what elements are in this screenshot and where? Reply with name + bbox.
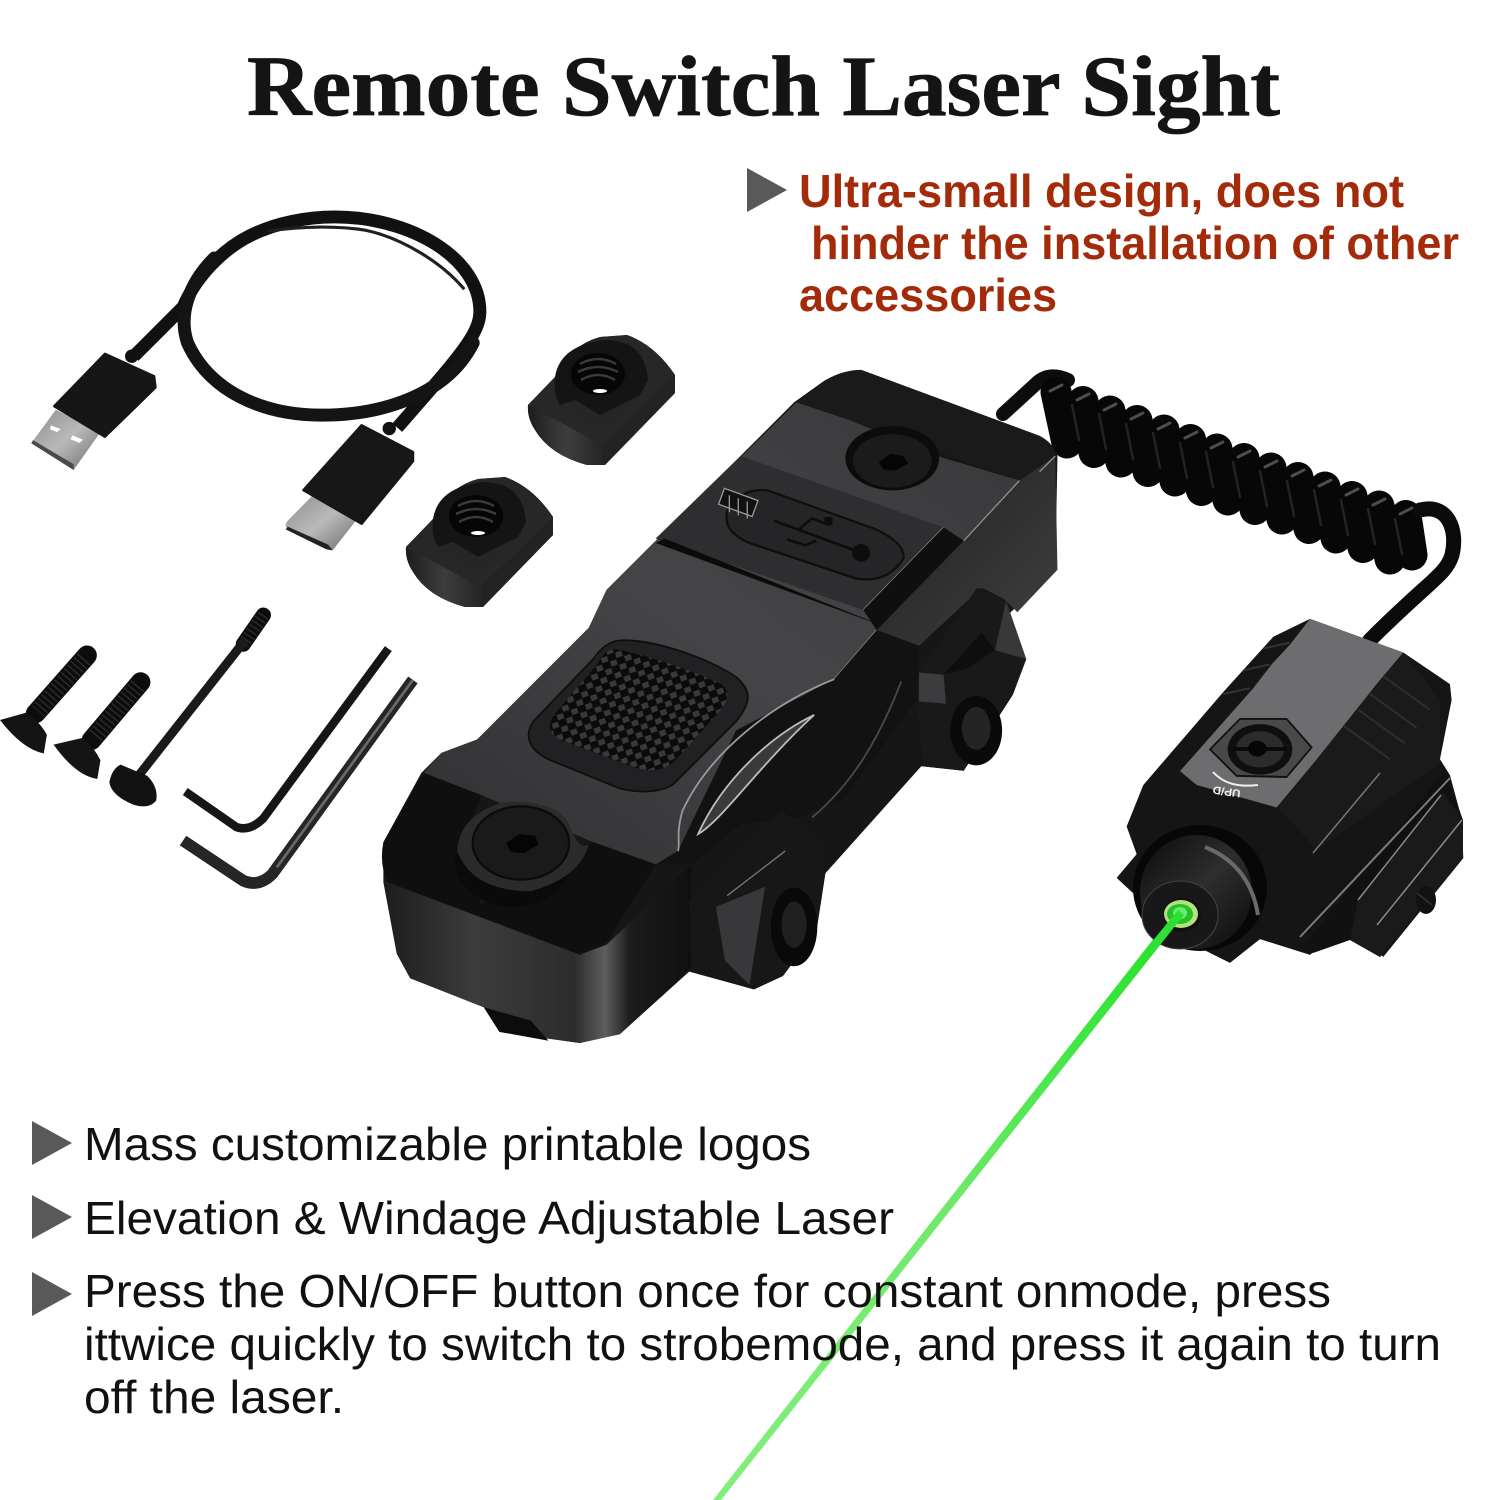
bottom mounting foot bbox=[484, 1007, 549, 1041]
feature: adjustable laser: Elevation & Windage Adjustable Laser bbox=[84, 1192, 894, 1244]
feature: button operation: off the laser. bbox=[84, 1371, 344, 1423]
body silhouette bbox=[383, 370, 1057, 1043]
groove bbox=[656, 539, 877, 623]
side notch bbox=[863, 527, 964, 630]
edge highlights bbox=[834, 456, 1055, 679]
callout: ultra-small design: Ultra-small design, does not bbox=[799, 165, 1404, 217]
feature: button operation: Press the ON/OFF button once for constant onmode, press bbox=[84, 1265, 1331, 1317]
front side face bbox=[383, 864, 691, 1043]
T-nut mount 1 bbox=[528, 335, 675, 465]
laser sight module bbox=[1117, 619, 1463, 963]
lens housing bbox=[1133, 825, 1267, 951]
switch recess bbox=[529, 640, 748, 791]
UP/D marking: UP/D bbox=[1212, 783, 1241, 799]
coiled cable bbox=[1003, 376, 1454, 640]
callout: ultra-small design bbox=[747, 165, 1459, 321]
feature list bbox=[32, 1118, 1441, 1423]
callout: ultra-small design: accessories bbox=[799, 269, 1057, 321]
USB cover band bbox=[656, 456, 944, 610]
callout: ultra-small design: hinder the installation of other bbox=[811, 217, 1459, 269]
grey top face bbox=[424, 402, 1020, 864]
hex keys bbox=[183, 649, 413, 883]
knurled pressure button bbox=[550, 649, 727, 770]
curved clamp cut-out bbox=[656, 630, 919, 864]
UP/D marking bbox=[1212, 772, 1258, 799]
green laser beam bbox=[713, 909, 1184, 1500]
top dark band bbox=[794, 370, 1055, 481]
mounting screws bbox=[0, 615, 263, 806]
USB-A to USB-C charging cable bbox=[31, 217, 480, 550]
feature: button operation bbox=[32, 1265, 1441, 1423]
remote pressure switch body bbox=[382, 370, 1057, 1043]
top hex screw bbox=[845, 426, 939, 490]
title: Remote Switch Laser Sight bbox=[247, 38, 1280, 134]
feature: button operation: ittwice quickly to switch to strobemode, and press it again to turn bbox=[84, 1318, 1441, 1370]
left clamp knob bbox=[689, 811, 825, 989]
right side face bbox=[877, 456, 1057, 646]
USB port cover bbox=[719, 488, 904, 579]
T-nut mount 2 bbox=[406, 477, 553, 607]
beam segment over lens bbox=[1141, 910, 1184, 960]
module housing bbox=[1117, 619, 1463, 963]
front corner black plate bbox=[382, 773, 656, 955]
rail clamp bbox=[1300, 770, 1463, 957]
feature: printable logos: Mass customizable printable logos bbox=[84, 1118, 811, 1170]
front hex screw bbox=[455, 802, 589, 907]
green laser aperture bbox=[1163, 898, 1201, 932]
right clamp knob bbox=[917, 588, 1026, 771]
